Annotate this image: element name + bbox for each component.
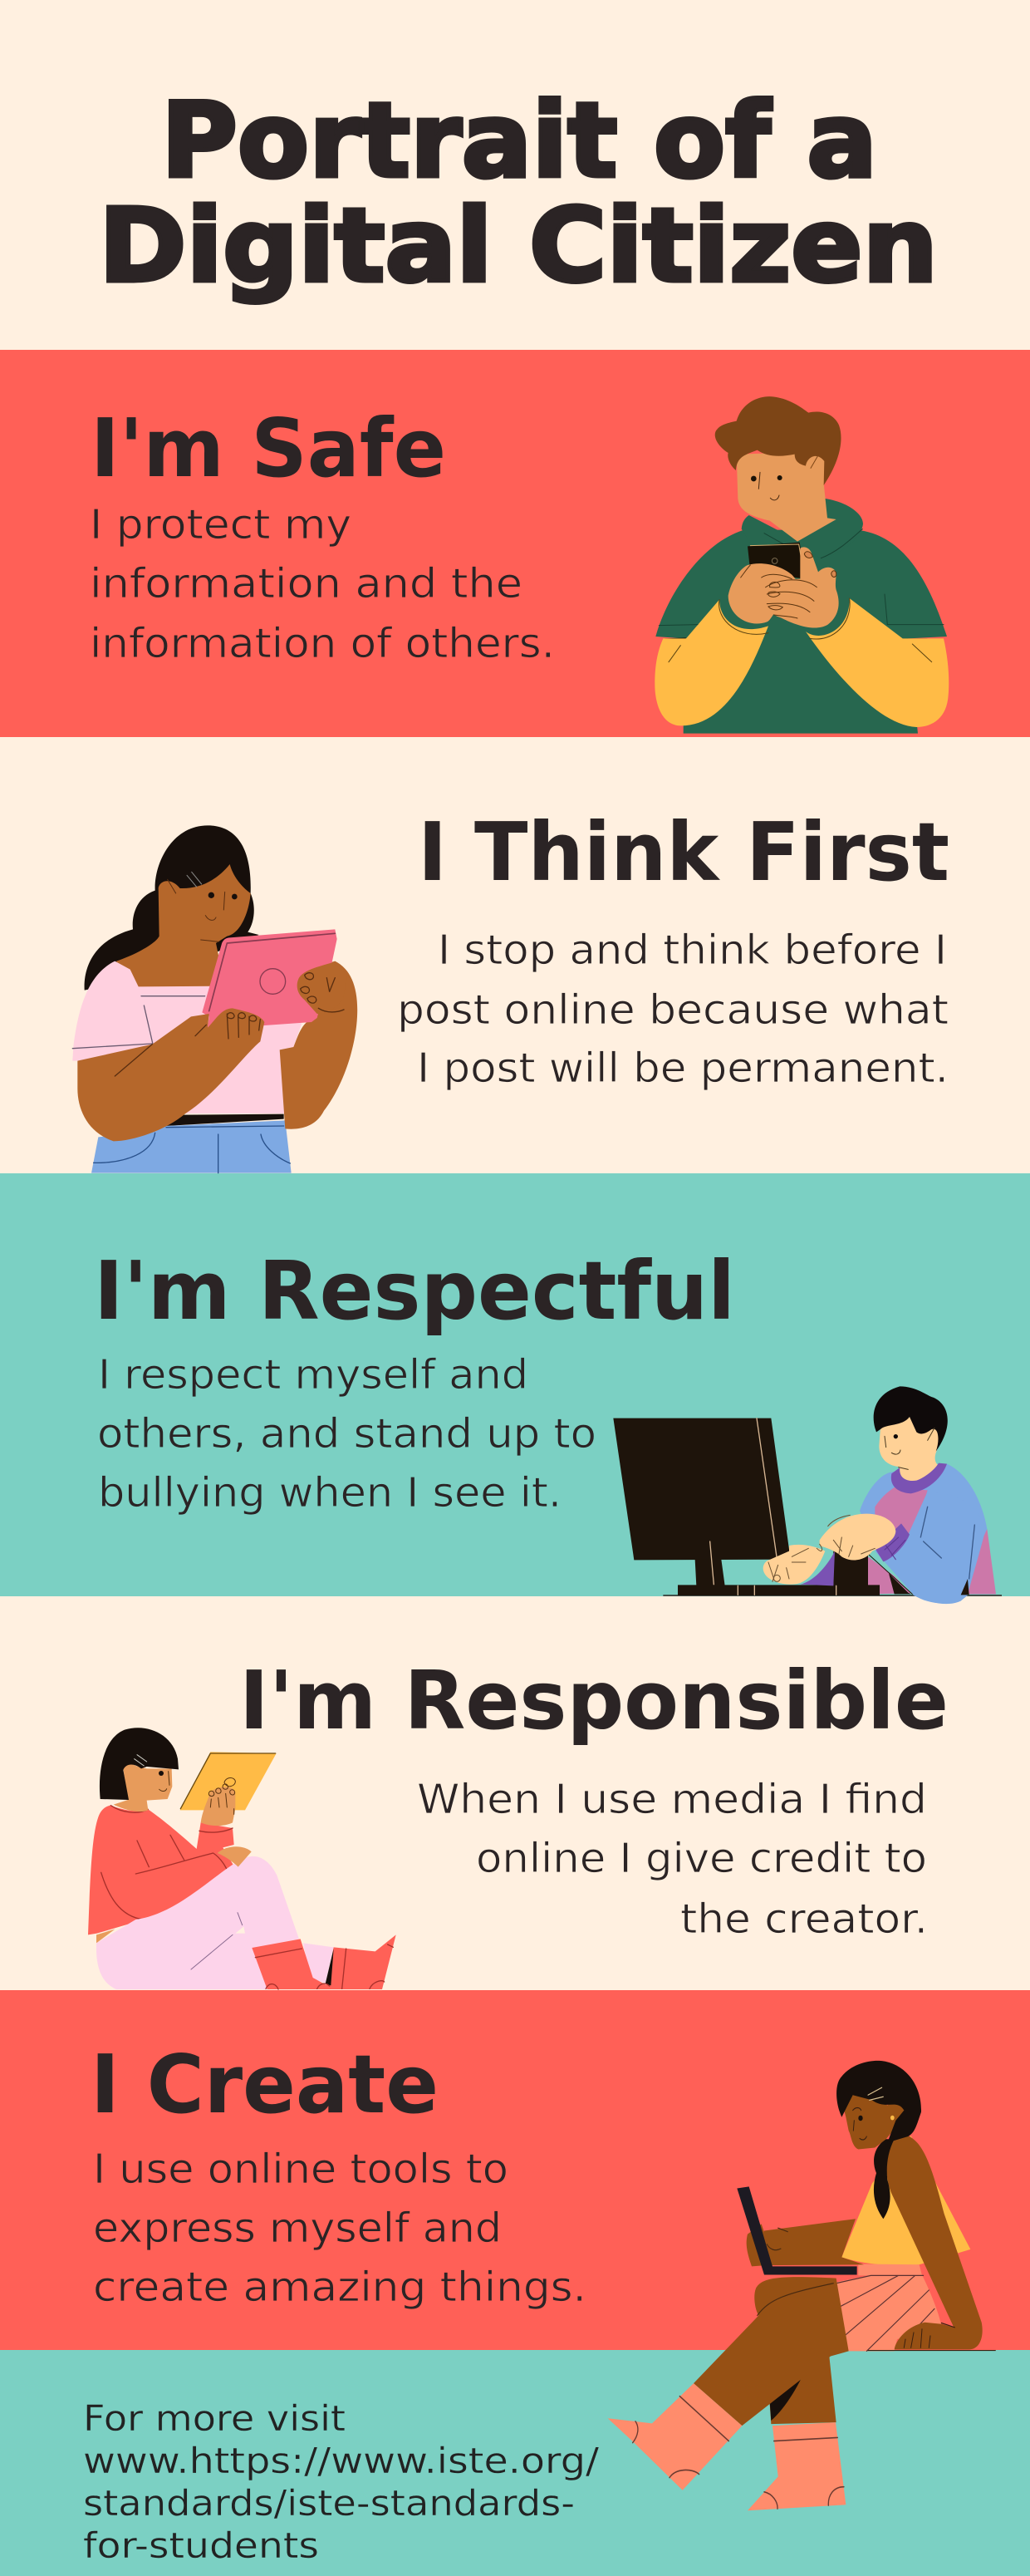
text block: think first description xyxy=(397,927,949,1092)
text block: create description: create amazing things. xyxy=(93,2264,586,2311)
panel: I'm Safe xyxy=(0,350,1030,737)
illustration: boy at computer xyxy=(613,1386,1002,1604)
text block: create description: I use online tools to xyxy=(93,2146,508,2193)
illustration: girl with pink tablet xyxy=(72,825,357,1173)
text block: respectful description: others, and stand up to xyxy=(97,1410,596,1458)
text block: create description: express myself and xyxy=(93,2205,502,2252)
text block: footer link: www.https://www.iste.org/ xyxy=(83,2441,600,2482)
text block: footer link xyxy=(83,2399,600,2567)
heading: I Create: I Create xyxy=(91,2038,439,2131)
panel: I'm Responsible xyxy=(0,1596,1030,1990)
text block: safe description: I protect my xyxy=(90,501,351,548)
text block: think first description: I stop and think before I xyxy=(438,927,947,974)
text block: responsible description: online I give credit to xyxy=(476,1835,927,1882)
text block: respectful description: bullying when I see it. xyxy=(98,1469,562,1517)
text block: responsible description: When I use media I find xyxy=(417,1776,927,1823)
heading: I'm Safe: I'm Safe xyxy=(91,401,446,495)
text block: respectful description: I respect myself and xyxy=(98,1351,528,1399)
panel: I Create xyxy=(0,1990,1030,2350)
heading: I Think First: I Think First xyxy=(418,805,949,899)
text block: create description xyxy=(93,2146,586,2311)
heading: I'm Responsible: I'm Responsible xyxy=(239,1654,949,1748)
panel: title background xyxy=(0,0,1030,350)
panel: I Think First xyxy=(0,737,1030,1173)
text block: footer link: for-students xyxy=(83,2526,319,2567)
title: Portrait of a xyxy=(161,81,877,201)
panel: I'm Respectful xyxy=(0,1173,1030,1596)
text block: respectful description xyxy=(97,1351,596,1517)
text block: responsible description: the creator. xyxy=(680,1895,928,1943)
text block: footer link: For more visit xyxy=(83,2399,346,2440)
illustration: girl sitting with laptop xyxy=(608,2061,995,2510)
text block: safe description xyxy=(90,501,555,667)
text block: think first description: post online because what xyxy=(397,986,949,1034)
text block: safe description: information and the xyxy=(90,560,522,607)
illustration: boy with phone xyxy=(655,396,949,734)
heading: I'm Respectful: I'm Respectful xyxy=(94,1244,735,1338)
panel: footer xyxy=(0,2350,1030,2576)
text block: think first description: I post will be permanent. xyxy=(417,1045,949,1092)
title xyxy=(99,81,938,305)
text block: footer link: standards/iste-standards- xyxy=(83,2484,575,2524)
text block: responsible description xyxy=(417,1776,928,1943)
text block: safe description: information of others. xyxy=(90,620,555,667)
title: Digital Citizen xyxy=(99,187,938,305)
illustration: girl sitting with yellow tablet xyxy=(88,1728,396,1989)
